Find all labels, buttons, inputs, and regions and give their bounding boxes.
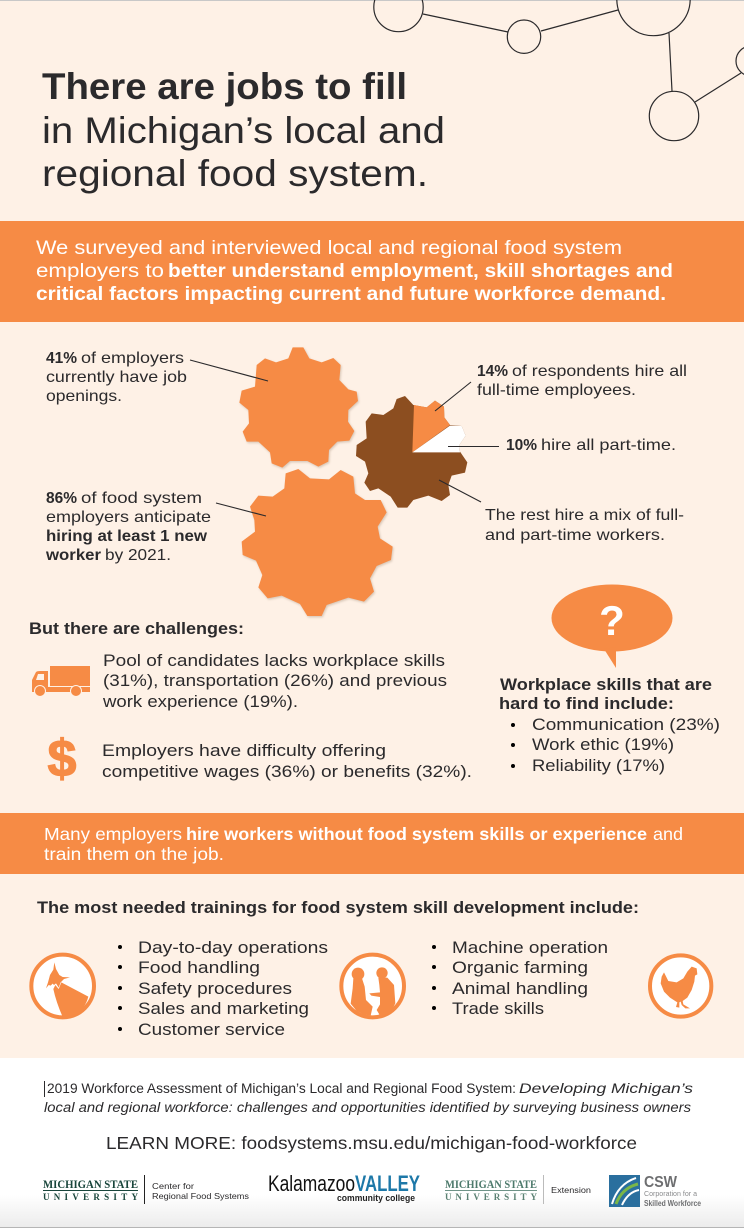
logo: MSU Extension bbox=[445, 1175, 591, 1204]
list: trainings column one bbox=[118, 938, 328, 1039]
icon: question speech bubble: ? bbox=[599, 597, 625, 644]
logo: Kalamazoo Valley bbox=[268, 1171, 420, 1204]
gears chart bbox=[190, 347, 499, 616]
logo: Kalamazoo Valley: community college bbox=[337, 1193, 415, 1204]
logo: MSU Center for Regional Food Systems: Regional Food Systems bbox=[152, 1191, 249, 1201]
text: hard to find skills list bbox=[499, 675, 720, 775]
banner: survey intro bbox=[0, 221, 744, 322]
footer panel bbox=[0, 1058, 744, 1228]
text: the rest mix: The rest hire a mix of full- bbox=[485, 507, 684, 524]
icon: chicken bbox=[650, 955, 711, 1017]
citation: 2019 Workforce Assessment of Michigan’s Local and Regional Food System: bbox=[47, 1081, 516, 1096]
logo: MSU Extension: Extension bbox=[551, 1185, 591, 1195]
text: candidates lack skills: Pool of candidates lacks workplace skills bbox=[103, 651, 445, 670]
title: There are jobs to fill bbox=[42, 66, 407, 107]
citation bbox=[44, 1081, 693, 1115]
logo: MSU Extension: UNIVERSITY bbox=[445, 1192, 538, 1202]
text: 41% of employers: currently have job bbox=[46, 369, 187, 386]
banner: train on the job: hire workers without food system skills or experience bbox=[186, 824, 647, 844]
text: 41% of employers: of employers bbox=[81, 350, 184, 367]
icon: dollar sign: $ bbox=[48, 730, 77, 788]
icon: question speech bubble bbox=[552, 584, 672, 668]
text: 86% anticipate hiring bbox=[45, 490, 211, 564]
text: 10% part-time: 10% bbox=[506, 437, 537, 454]
text: hard to find skills list: Work ethic (19%) bbox=[532, 735, 674, 754]
logo: CSW: Skilled Workforce bbox=[644, 1199, 701, 1208]
banner: train on the job bbox=[0, 813, 744, 874]
heading: most needed trainings: The most needed trainings for food system skill development include: bbox=[37, 898, 639, 917]
list: trainings column two: Organic farming bbox=[452, 958, 588, 977]
icon: eggplant bbox=[31, 955, 94, 1017]
text: hard to find skills list: Communication (23%) bbox=[532, 715, 720, 734]
text: wages and benefits: competitive wages (36%) or benefits (32%). bbox=[102, 762, 472, 781]
text: hard to find skills list: Workplace skills that are bbox=[500, 675, 712, 694]
logo: MSU Center for Regional Food Systems bbox=[43, 1175, 249, 1204]
gear: employment type pie bbox=[356, 396, 467, 508]
list: trainings column two: Machine operation bbox=[452, 938, 608, 957]
list: trainings column one: Customer service bbox=[138, 1020, 285, 1039]
logo: MSU Center for Regional Food Systems: Center for bbox=[152, 1181, 194, 1191]
list: trainings column two bbox=[432, 938, 608, 1018]
logo: CSW: Corporation for a bbox=[644, 1189, 698, 1198]
text: 86% anticipate hiring: employers anticipate bbox=[46, 509, 211, 526]
text: wages and benefits: Employers have difficulty offering bbox=[102, 741, 386, 760]
text: 86% anticipate hiring: worker bbox=[45, 547, 101, 564]
text: hard to find skills list: hard to find include: bbox=[499, 694, 674, 713]
gear: 86% anticipate hiring bbox=[242, 469, 393, 616]
text: wages and benefits bbox=[102, 741, 472, 781]
text: 41% of employers: openings. bbox=[46, 388, 122, 405]
text: hard to find skills list: Reliability (17%) bbox=[532, 756, 665, 775]
logo: Kalamazoo Valley: VALLEY bbox=[355, 1171, 420, 1196]
title bbox=[42, 66, 445, 194]
logo: MSU Extension: MICHIGAN STATE bbox=[445, 1177, 537, 1191]
icon: truck bbox=[32, 666, 90, 696]
list: trainings column one: Food handling bbox=[138, 958, 260, 977]
logo: Kalamazoo Valley: Kalamazoo bbox=[268, 1171, 355, 1196]
text: 86% anticipate hiring: 86% bbox=[46, 490, 77, 507]
logo: MSU Center for Regional Food Systems: MICHIGAN STATE bbox=[43, 1177, 138, 1191]
title: in Michigan’s local and bbox=[42, 110, 445, 151]
banner: train on the job: train them on the job. bbox=[44, 844, 224, 864]
network of circles decoration bbox=[374, 0, 744, 141]
text: 41% of employers bbox=[46, 350, 187, 405]
banner: train on the job: and bbox=[653, 824, 683, 844]
text: 86% anticipate hiring: by 2021. bbox=[105, 547, 171, 564]
banner: survey intro: better understand employment, skill shortages and bbox=[168, 260, 673, 282]
logo: CSW bbox=[609, 1174, 701, 1208]
learn more link: LEARN MORE: foodsystems.msu.edu/michigan-food-workforce bbox=[106, 1133, 637, 1153]
text: 14% full-time: 14% bbox=[477, 363, 508, 380]
text: 10% part-time: hire all part-time. bbox=[541, 437, 676, 454]
heading: challenges: But there are challenges: bbox=[29, 619, 244, 638]
text: 14% full-time: full-time employees. bbox=[477, 382, 636, 399]
logo: CSW: CSW bbox=[644, 1174, 678, 1191]
list: trainings column one: Sales and marketing bbox=[138, 999, 309, 1018]
text: candidates lack skills bbox=[102, 651, 447, 711]
list: trainings column two: Trade skills bbox=[452, 999, 544, 1018]
gear: 41% with job openings bbox=[239, 347, 358, 468]
list: trainings column two: Animal handling bbox=[452, 979, 588, 998]
banner: survey intro: We surveyed and interviewed local and regional food system bbox=[36, 237, 622, 259]
title: regional food system. bbox=[42, 153, 428, 194]
text: the rest mix: and part-time workers. bbox=[485, 527, 665, 544]
text: 14% full-time bbox=[477, 363, 687, 399]
banner: train on the job: Many employers bbox=[44, 824, 182, 844]
text: candidates lack skills: (31%), transportation (26%) and previous bbox=[103, 671, 447, 690]
text: the rest mix bbox=[485, 507, 684, 544]
text: 86% anticipate hiring: of food system bbox=[81, 490, 202, 507]
logo: MSU Center for Regional Food Systems: UNIVERSITY bbox=[43, 1192, 138, 1202]
citation: Developing Michigan’s bbox=[519, 1081, 693, 1096]
text: 14% full-time: of respondents hire all bbox=[512, 363, 687, 380]
citation: local and regional workforce: challenges and opportunities identified by surveying business owners bbox=[44, 1100, 691, 1115]
leader lines bbox=[190, 360, 499, 516]
list: trainings column one: Day-to-day operations bbox=[138, 938, 328, 957]
text: 86% anticipate hiring: hiring at least 1 new bbox=[46, 528, 208, 545]
icon: two people bbox=[341, 955, 404, 1017]
text: 41% of employers: 41% bbox=[46, 350, 77, 367]
text: candidates lack skills: work experience (19%). bbox=[102, 692, 298, 711]
list: trainings column one: Safety procedures bbox=[138, 979, 292, 998]
banner: survey intro: employers to bbox=[36, 260, 164, 282]
banner: survey intro: critical factors impacting current and future workforce demand. bbox=[36, 283, 666, 305]
